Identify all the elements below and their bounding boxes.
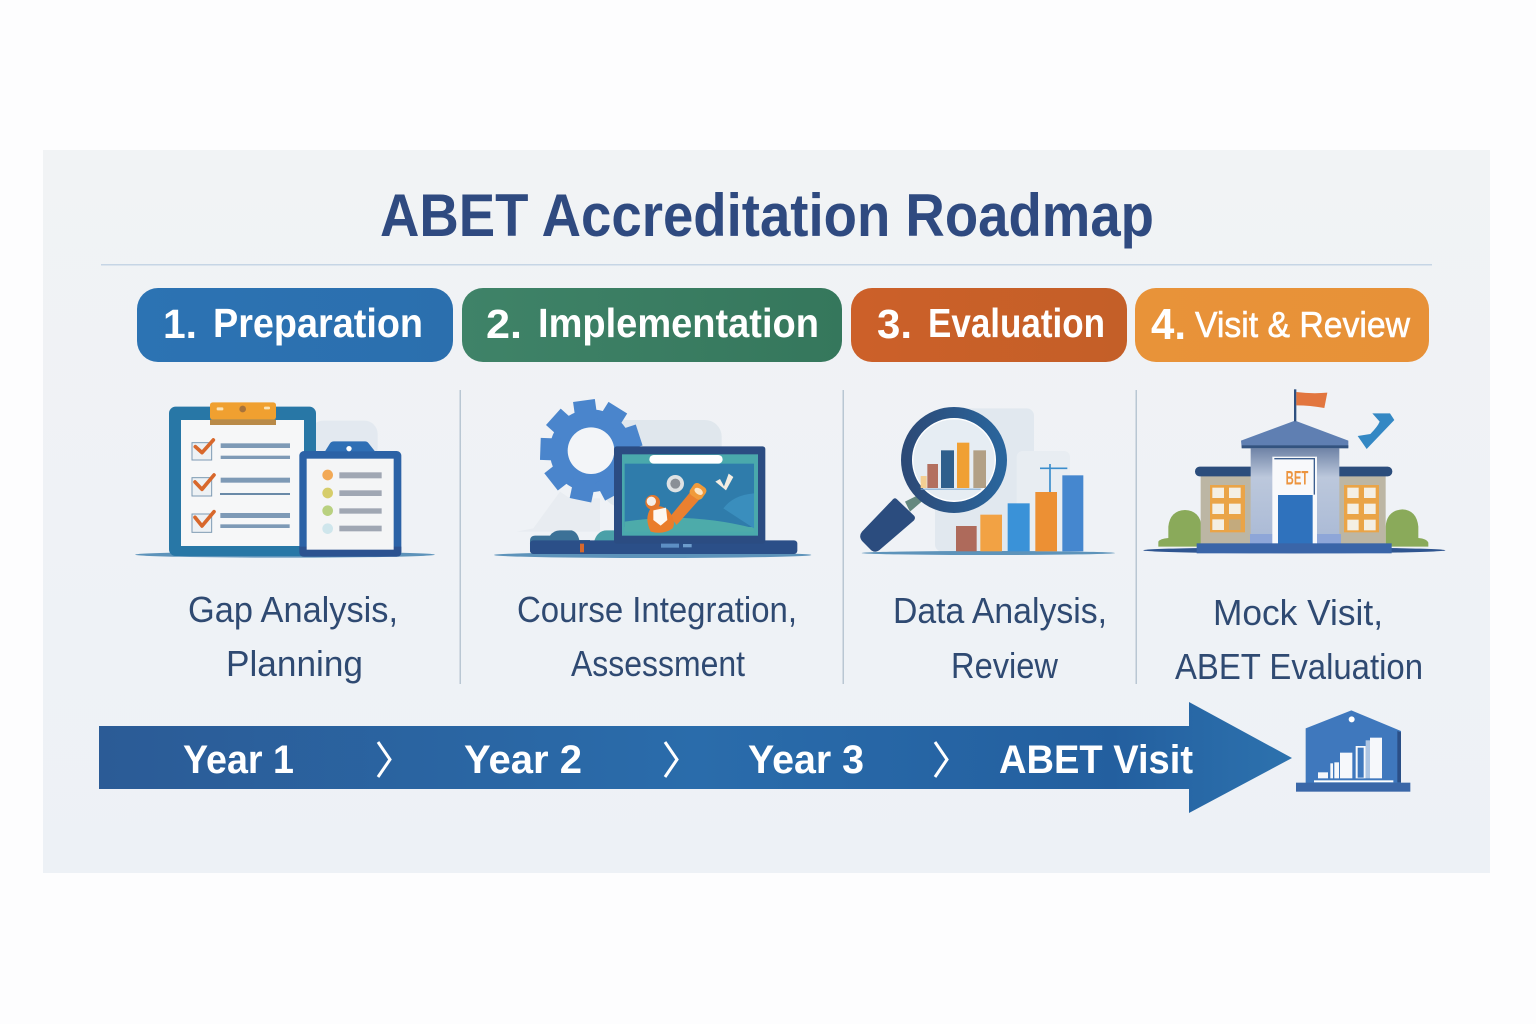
caption: phase 1: Gap Analysis, (188, 589, 398, 630)
icon: clipboards with checklists (135, 402, 435, 558)
chart bars (956, 464, 1083, 551)
icon: magnifying glass and bar chart (860, 408, 1115, 555)
shrubs (1158, 509, 1428, 547)
timeline arrow: ABET Visit (999, 738, 1193, 782)
timeline arrow: Year 3 (748, 738, 864, 782)
caption: phase 3: Data Analysis, (893, 590, 1107, 631)
magnifier (860, 413, 1001, 552)
timeline arrow: Year 1 (183, 738, 294, 782)
icon: building with growth chart (1296, 710, 1410, 792)
caption: phase 2 (517, 589, 797, 684)
timeline arrow: Year 2 (464, 738, 582, 782)
icon: laptop screen (614, 446, 765, 544)
phase 2 header: 2. (486, 301, 522, 347)
caption: phase 2: Assessment (571, 643, 745, 684)
icon: gear and laptop (494, 399, 811, 558)
caption: phase 4: Mock Visit, (1213, 592, 1383, 633)
phase 3 header (851, 288, 1127, 362)
windows right (1344, 485, 1379, 532)
icon: status list (322, 470, 382, 534)
caption: phase 2: Course Integration, (517, 589, 797, 630)
phase 3 header: 3. (877, 301, 912, 347)
caption: phase 1: Planning (226, 643, 363, 684)
icon: gear (540, 399, 643, 503)
icon: checked item 1 (192, 440, 290, 460)
phase 3 header: Evaluation (928, 300, 1105, 346)
sign text: BET (1286, 468, 1308, 489)
icon: checked item 2 (192, 475, 290, 496)
phase 2 header (462, 288, 842, 362)
caption: phase 4 (1175, 592, 1423, 687)
phase 1 header: 1. (163, 301, 197, 347)
caption: phase 3: Review (951, 645, 1059, 686)
icon: checked item 3 (192, 512, 290, 532)
caption: phase 4: ABET Evaluation (1175, 646, 1423, 687)
caption: phase 3 (893, 590, 1107, 686)
phase 1 header (137, 288, 453, 362)
background panel (43, 150, 1490, 873)
phase 4 header (1135, 288, 1429, 362)
caption: phase 1 (188, 589, 398, 684)
icon: orange wrench (645, 481, 708, 533)
phase 1 header: Preparation (213, 300, 423, 346)
title: ABET Accreditation Roadmap (380, 182, 1154, 249)
timeline arrow (99, 702, 1292, 813)
windows left (1210, 485, 1245, 532)
phase 4 header: 4. (1151, 300, 1186, 349)
phase 2 header: Implementation (538, 300, 819, 346)
icon: campus building (1143, 389, 1445, 553)
phase 4 header: Visit & Review (1195, 304, 1411, 345)
